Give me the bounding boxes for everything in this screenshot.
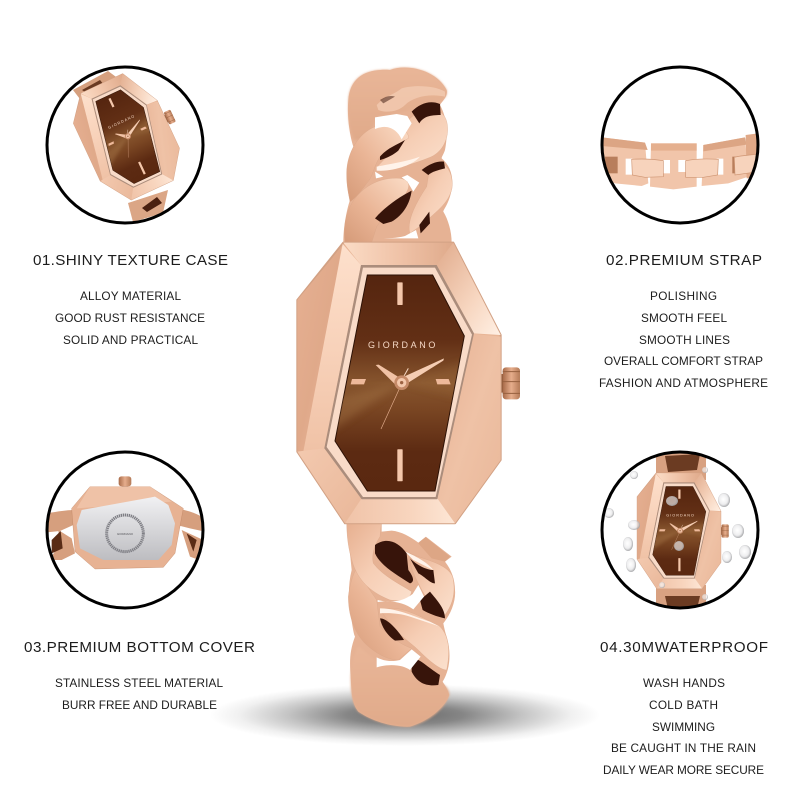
feature list 04 <box>603 676 764 777</box>
watch case <box>297 243 520 523</box>
main watch <box>297 67 520 727</box>
feature list 04: SWIMMING <box>652 720 715 734</box>
feature list 02: OVERALL COMFORT STRAP <box>604 354 763 368</box>
ground shadow <box>210 684 600 746</box>
brand name: GIORDANO <box>368 340 435 350</box>
feature list 01 <box>55 289 205 347</box>
feature list 03: STAINLESS STEEL MATERIAL <box>55 676 223 690</box>
circle image: case back <box>47 452 205 608</box>
mini logo: GIORDANO <box>108 114 135 130</box>
circle image: watch with water drops <box>602 452 758 613</box>
feature list 01: GOOD RUST RESISTANCE <box>55 311 205 325</box>
gaps <box>377 524 427 670</box>
feature list 02: POLISHING <box>650 289 717 303</box>
heading 01: 01.SHINY TEXTURE CASE <box>33 252 228 269</box>
callout: 30m waterproof <box>600 452 768 777</box>
engraved text: GIORDANO <box>117 532 134 536</box>
feature list 01: ALLOY MATERIAL <box>80 289 181 303</box>
feature list 02: SMOOTH FEEL <box>641 311 727 325</box>
dark reflections <box>375 96 445 233</box>
callout: shiny texture case <box>33 62 228 347</box>
gaps <box>375 114 419 238</box>
mini logo: GIORDANO <box>666 513 694 517</box>
circle image: strap links <box>602 67 758 223</box>
heading 02: 02.PREMIUM STRAP <box>606 252 762 269</box>
feature list 02 <box>599 289 768 390</box>
feature list 03: BURR FREE AND DURABLE <box>62 698 217 712</box>
feature list 02: FASHION AND ATMOSPHERE <box>599 376 768 390</box>
feature list 01: SOLID AND PRACTICAL <box>63 333 198 347</box>
feature list 04: DAILY WEAR MORE SECURE <box>603 763 764 777</box>
callout: premium strap <box>599 67 768 390</box>
feature list 03 <box>55 676 223 712</box>
dark reflections <box>375 541 445 685</box>
lower bracelet <box>347 520 455 727</box>
feature list 04: BE CAUGHT IN THE RAIN <box>611 741 756 755</box>
feature list 04: WASH HANDS <box>643 676 725 690</box>
feature list 02: SMOOTH LINES <box>639 333 730 347</box>
feature list 04: COLD BATH <box>649 698 718 712</box>
heading 03: 03.PREMIUM BOTTOM COVER <box>24 639 255 656</box>
callout: premium bottom cover <box>24 452 255 712</box>
heading 04: 04.30MWATERPROOF <box>600 639 768 656</box>
circle image: case close-up <box>47 62 203 223</box>
upper bracelet <box>343 67 452 243</box>
